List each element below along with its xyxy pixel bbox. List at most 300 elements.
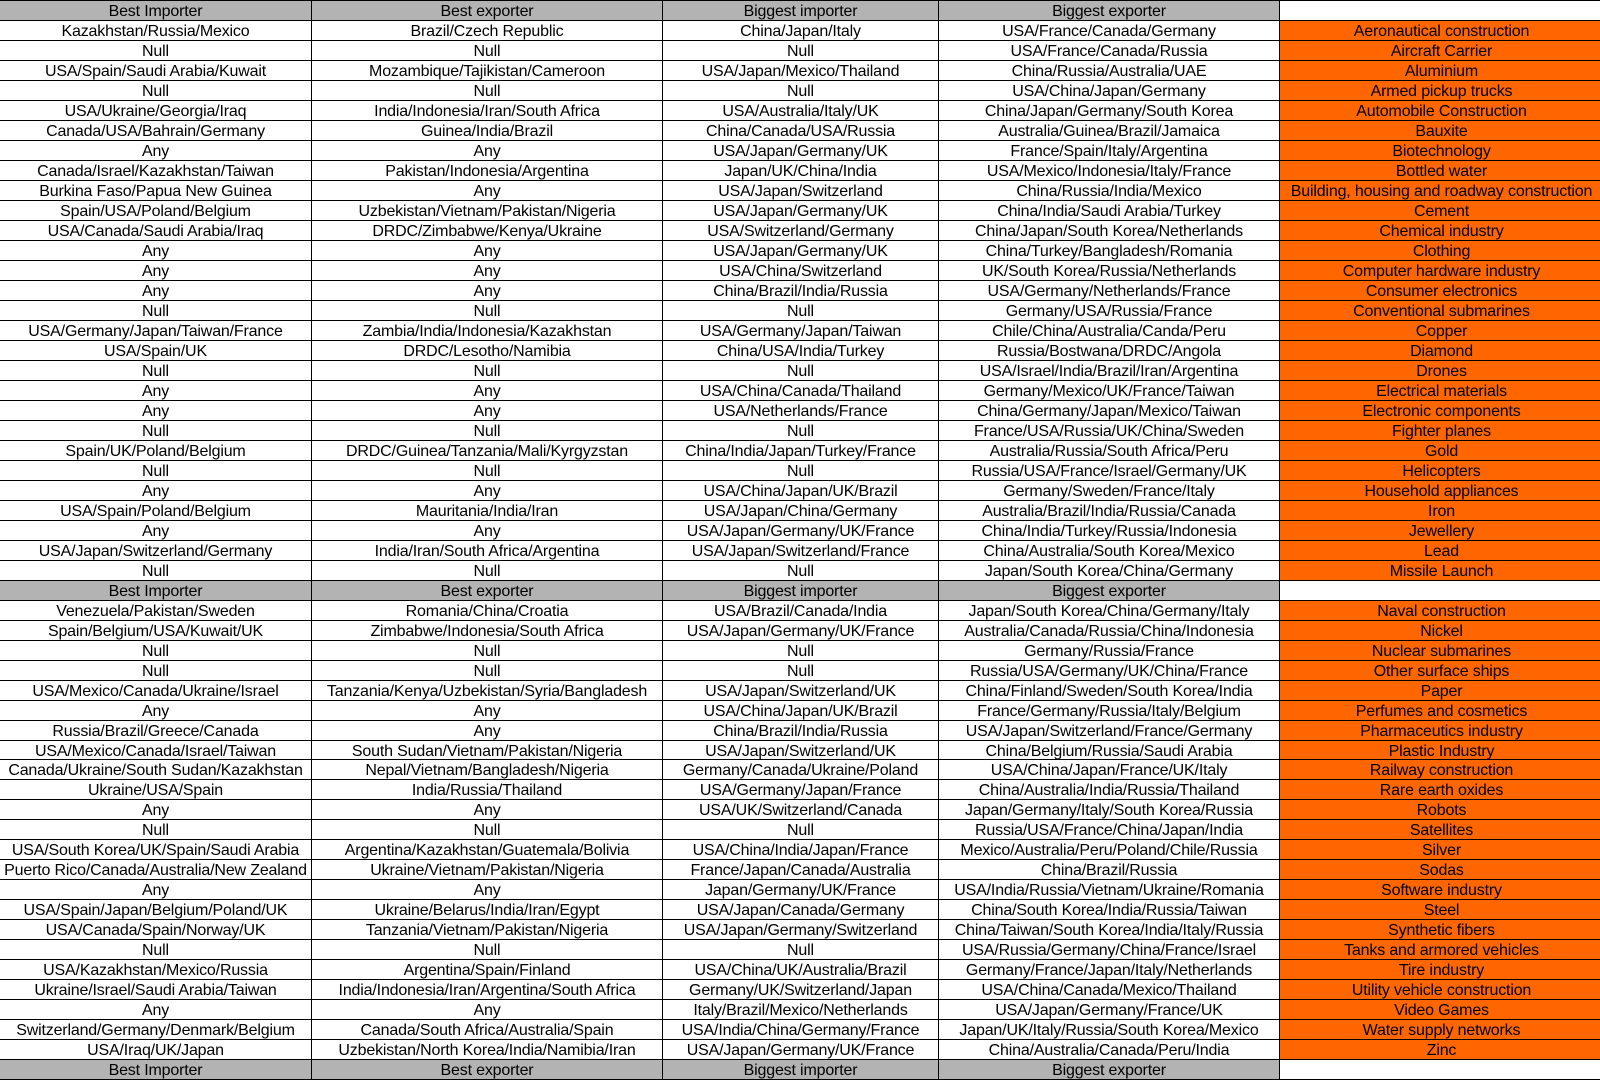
row: Pharmaceutics industry: Russia/Brazil/Greece/Canada [52, 723, 259, 740]
row: Robots: Any [142, 802, 169, 819]
row: Aircraft Carrier: Null [474, 43, 500, 60]
row: Nickel: USA/Japan/Germany/UK/France [687, 623, 914, 640]
row: Chemical industry [0, 220, 1600, 241]
row: Biotechnology: Any [473, 143, 501, 160]
row: Robots: Any [473, 802, 501, 819]
row: Iron: Mauritania/India/Iran [416, 503, 558, 520]
row: Chemical industry: USA/Switzerland/Germany [707, 223, 894, 240]
row: Gold: Gold [1425, 443, 1458, 460]
row: Paper: China/Finland/Sweden/South Korea/India [965, 683, 1253, 700]
row: Bauxite: Bauxite [1415, 123, 1468, 140]
row: Paper: Paper [1421, 683, 1462, 700]
row: Robots [0, 799, 1600, 820]
row: Diamond: Russia/Bostwana/DRDC/Angola [997, 343, 1221, 360]
row: Bauxite: China/Canada/USA/Russia [706, 123, 895, 140]
row: Naval construction: Romania/China/Croatia [406, 603, 568, 620]
row: Bauxite: Australia/Guinea/Brazil/Jamaica [998, 123, 1220, 140]
row: Aluminium: Mozambique/Tajikistan/Cameroon [369, 63, 605, 80]
row: Rare earth oxides: Rare earth oxides [1380, 782, 1503, 799]
row: Perfumes and cosmetics: Any [142, 703, 169, 720]
row: Software industry: USA/India/Russia/Vietnam/Ukraine/Romania [954, 882, 1264, 899]
row: Tire industry: Argentina/Spain/Finland [404, 962, 570, 979]
header row 2: Biggest importer [744, 583, 857, 600]
row: Naval construction: Japan/South Korea/China/Germany/Italy [968, 603, 1249, 620]
row: Zinc [0, 1039, 1600, 1060]
row: Conventional submarines: Conventional submarines [1353, 303, 1530, 320]
row: Aluminium: USA/Japan/Mexico/Thailand [702, 63, 899, 80]
header row 1: Best Importer [109, 3, 202, 20]
row: Missile Launch: Missile Launch [1390, 563, 1493, 580]
row: Bauxite [0, 120, 1600, 141]
row: Electronic components: Any [473, 403, 501, 420]
row: Fighter planes: France/USA/Russia/UK/China/Sweden [974, 423, 1244, 440]
row: Armed pickup trucks: Null [787, 83, 814, 100]
row: Aluminium: China/Russia/Australia/UAE [1012, 63, 1206, 80]
row: Software industry: Any [142, 882, 169, 899]
row: Zinc: China/Australia/Canada/Peru/India [989, 1042, 1229, 1059]
row: Electrical materials: USA/China/Canada/Thailand [700, 383, 901, 400]
row: Drones: Null [142, 363, 169, 380]
row: Railway construction: Canada/Ukraine/South Sudan/Kazakhstan [8, 762, 303, 779]
row: Other surface ships: Null [787, 663, 814, 680]
header row 2 [0, 580, 1600, 601]
row: Gold: DRDC/Guinea/Tanzania/Mali/Kyrgyzstan [346, 443, 628, 460]
row: Video Games: USA/Japan/Germany/France/UK [995, 1002, 1223, 1019]
row: Perfumes and cosmetics [0, 700, 1600, 721]
row: Plastic Industry: Plastic Industry [1389, 743, 1494, 760]
row: Aeronautical construction: USA/France/Canada/Germany [1002, 23, 1216, 40]
row: Bottled water: USA/Mexico/Indonesia/Italy/France [987, 163, 1231, 180]
row: Synthetic fibers [0, 919, 1600, 940]
row: Jewellery: Jewellery [1409, 523, 1474, 540]
row: Perfumes and cosmetics: USA/China/Japan/UK/Brazil [703, 703, 898, 720]
row: Automobile Construction [0, 100, 1600, 121]
row: Zinc: USA/Iraq/UK/Japan [87, 1042, 224, 1059]
row: Water supply networks [0, 1019, 1600, 1040]
row: Video Games: Italy/Brazil/Mexico/Netherlands [693, 1002, 908, 1019]
row: Nuclear submarines [0, 640, 1600, 661]
row: Fighter planes: Null [474, 423, 500, 440]
row: Naval construction: USA/Brazil/Canada/India [714, 603, 887, 620]
row: Sodas: Sodas [1419, 862, 1464, 879]
row: Silver: Argentina/Kazakhstan/Guatemala/Bolivia [345, 842, 629, 859]
row: Synthetic fibers: USA/Canada/Spain/Norway/UK [46, 922, 265, 939]
row: Pharmaceutics industry: Pharmaceutics industry [1360, 723, 1523, 740]
row: Jewellery [0, 520, 1600, 541]
row: Fighter planes: Fighter planes [1392, 423, 1491, 440]
row: Zinc: USA/Japan/Germany/UK/France [687, 1042, 914, 1059]
row: Conventional submarines: Germany/USA/Russia/France [1006, 303, 1212, 320]
header row 3 [0, 1059, 1600, 1080]
header row 3: Biggest importer [744, 1062, 857, 1079]
row: Satellites: Null [142, 822, 169, 839]
row: Silver: USA/China/India/Japan/France [693, 842, 908, 859]
row: Building, housing and roadway construction [0, 180, 1600, 201]
row: Rare earth oxides: China/Australia/India/Russia/Thailand [979, 782, 1239, 799]
row: Silver [0, 839, 1600, 860]
row: Biotechnology [0, 140, 1600, 161]
row: Diamond: China/USA/India/Turkey [717, 343, 884, 360]
row: Armed pickup trucks [0, 80, 1600, 101]
row: Rare earth oxides: Ukraine/USA/Spain [88, 782, 223, 799]
row: Building, housing and roadway construction: USA/Japan/Switzerland [718, 183, 883, 200]
row: Nickel: Zimbabwe/Indonesia/South Africa [370, 623, 604, 640]
row: Computer hardware industry: USA/China/Switzerland [719, 263, 882, 280]
row: Automobile Construction: China/Japan/Germany/South Korea [985, 103, 1233, 120]
row: Fighter planes [0, 420, 1600, 441]
row: Bauxite: Guinea/India/Brazil [421, 123, 553, 140]
row: Missile Launch: Null [142, 563, 169, 580]
row: Aircraft Carrier: USA/France/Canada/Russia [1011, 43, 1207, 60]
row: Robots: Robots [1417, 802, 1466, 819]
row: Drones: Drones [1416, 363, 1467, 380]
row: Software industry: Any [473, 882, 501, 899]
row: Tire industry: USA/China/UK/Australia/Brazil [694, 962, 907, 979]
row: Building, housing and roadway construction: China/Russia/India/Mexico [1016, 183, 1202, 200]
row: Household appliances: Germany/Sweden/France/Italy [1003, 483, 1215, 500]
row: Chemical industry: USA/Canada/Saudi Arabia/Iraq [48, 223, 263, 240]
row: Railway construction: Nepal/Vietnam/Bangladesh/Nigeria [365, 762, 609, 779]
row: Jewellery: Any [142, 523, 169, 540]
row: Household appliances [0, 480, 1600, 501]
row: Nuclear submarines: Germany/Russia/France [1024, 643, 1194, 660]
row: Satellites: Satellites [1410, 822, 1473, 839]
row: Steel: USA/Japan/Canada/Germany [697, 902, 904, 919]
row: Video Games: Any [473, 1002, 501, 1019]
header row 3: Biggest exporter [1052, 1062, 1166, 1079]
row: Copper: USA/Germany/Japan/Taiwan [700, 323, 901, 340]
row: Missile Launch: Japan/South Korea/China/Germany [985, 563, 1233, 580]
row: Consumer electronics [0, 280, 1600, 301]
row: Tanks and armored vehicles: Null [474, 942, 500, 959]
row: Iron [0, 500, 1600, 521]
row: Aircraft Carrier [0, 40, 1600, 61]
row: Software industry [0, 879, 1600, 900]
row: Lead [0, 540, 1600, 561]
row: Utility vehicle construction: Utility vehicle construction [1352, 982, 1531, 999]
row: Aeronautical construction [0, 20, 1600, 41]
row: Electrical materials: Any [142, 383, 169, 400]
row: Silver: Silver [1422, 842, 1461, 859]
row: Electronic components: Any [142, 403, 169, 420]
row: Sodas: France/Japan/Canada/Australia [690, 862, 911, 879]
row: Naval construction: Naval construction [1377, 603, 1506, 620]
row: Aircraft Carrier: Aircraft Carrier [1391, 43, 1492, 60]
row: Diamond: USA/Spain/UK [104, 343, 207, 360]
row: Paper: Tanzania/Kenya/Uzbekistan/Syria/Bangladesh [327, 683, 647, 700]
row: Biotechnology: Biotechnology [1392, 143, 1491, 160]
row: Bottled water: Canada/Israel/Kazakhstan/Taiwan [37, 163, 274, 180]
row: Chemical industry: DRDC/Zimbabwe/Kenya/Ukraine [372, 223, 602, 240]
row: Conventional submarines [0, 300, 1600, 321]
row: Automobile Construction: Automobile Construction [1356, 103, 1527, 120]
row: Other surface ships: Null [142, 663, 169, 680]
row: Naval construction: Venezuela/Pakistan/Sweden [56, 603, 255, 620]
row: Tanks and armored vehicles: USA/Russia/Germany/China/France/Israel [962, 942, 1256, 959]
header row 2: Biggest exporter [1052, 583, 1166, 600]
row: Synthetic fibers: Tanzania/Vietnam/Pakistan/Nigeria [366, 922, 608, 939]
row: Conventional submarines: Null [142, 303, 169, 320]
row: Bottled water: Pakistan/Indonesia/Argentina [385, 163, 589, 180]
row: Clothing: Any [473, 243, 501, 260]
row: Automobile Construction: USA/Australia/Italy/UK [722, 103, 879, 120]
row: Nickel: Australia/Canada/Russia/China/Indonesia [964, 623, 1254, 640]
row: Bottled water [0, 160, 1600, 181]
header row 2: Best Importer [109, 583, 202, 600]
row: Tire industry: USA/Kazakhstan/Mexico/Russia [43, 962, 268, 979]
row: Lead: Lead [1424, 543, 1459, 560]
row: Plastic Industry: South Sudan/Vietnam/Pakistan/Nigeria [352, 743, 622, 760]
row: Household appliances: Any [473, 483, 501, 500]
row: Nuclear submarines: Null [142, 643, 169, 660]
row: Nickel: Nickel [1420, 623, 1463, 640]
row: Electrical materials: Any [473, 383, 501, 400]
row: Cement: USA/Japan/Germany/UK [713, 203, 888, 220]
row: Copper: USA/Germany/Japan/Taiwan/France [28, 323, 283, 340]
row: Pharmaceutics industry [0, 720, 1600, 741]
row: Cement: Uzbekistan/Vietnam/Pakistan/Nigeria [358, 203, 616, 220]
row: Robots: Japan/Germany/Italy/South Korea/Russia [965, 802, 1253, 819]
row: Copper: Zambia/India/Indonesia/Kazakhstan [363, 323, 611, 340]
row: Fighter planes: Null [142, 423, 169, 440]
row: Nickel [0, 620, 1600, 641]
row: Missile Launch: Null [474, 563, 500, 580]
row: Nuclear submarines: Null [474, 643, 500, 660]
row: Steel: Steel [1424, 902, 1459, 919]
row: Biotechnology: USA/Japan/Germany/UK [713, 143, 888, 160]
row: Aircraft Carrier: Null [787, 43, 814, 60]
row: Consumer electronics: Consumer electronics [1366, 283, 1517, 300]
row: Computer hardware industry: Any [142, 263, 169, 280]
row: Other surface ships: Other surface ships [1374, 663, 1509, 680]
row: Drones [0, 360, 1600, 381]
header row 1: Biggest importer [744, 3, 857, 20]
row: Zinc: Uzbekistan/North Korea/India/Namibia/Iran [338, 1042, 636, 1059]
row: Aluminium [0, 60, 1600, 81]
row: Armed pickup trucks: USA/China/Japan/Germany [1012, 83, 1206, 100]
row: Other surface ships: Russia/USA/Germany/UK/China/France [970, 663, 1248, 680]
row: Video Games: Video Games [1394, 1002, 1489, 1019]
row: Water supply networks: Canada/South Africa/Australia/Spain [361, 1022, 613, 1039]
row: Armed pickup trucks: Null [142, 83, 169, 100]
row: Aluminium: USA/Spain/Saudi Arabia/Kuwait [45, 63, 266, 80]
row: Tanks and armored vehicles: Null [142, 942, 169, 959]
row: Missile Launch: Null [787, 563, 814, 580]
row: Cement [0, 200, 1600, 221]
row: Tire industry: Tire industry [1399, 962, 1484, 979]
row: Gold: Australia/Russia/South Africa/Peru [990, 443, 1228, 460]
row: Other surface ships [0, 660, 1600, 681]
row: Electrical materials: Germany/Mexico/UK/France/Taiwan [984, 383, 1234, 400]
row: Lead: USA/Japan/Switzerland/Germany [39, 543, 272, 560]
row: Computer hardware industry [0, 260, 1600, 281]
row: Other surface ships: Null [474, 663, 500, 680]
row: Building, housing and roadway construction: Building, housing and roadway construction [1291, 183, 1592, 200]
row: Biotechnology: Any [142, 143, 169, 160]
row: Paper: USA/Japan/Switzerland/UK [705, 683, 896, 700]
row: Sodas: Ukraine/Vietnam/Pakistan/Nigeria [370, 862, 604, 879]
row: Lead: India/Iran/South Africa/Argentina [375, 543, 599, 560]
row: Video Games: Any [142, 1002, 169, 1019]
row: Copper [0, 320, 1600, 341]
row: Household appliances: Household appliances [1364, 483, 1519, 500]
row: Clothing: USA/Japan/Germany/UK [713, 243, 888, 260]
row: Steel [0, 899, 1600, 920]
row: Perfumes and cosmetics: Perfumes and cosmetics [1356, 703, 1527, 720]
row: Armed pickup trucks: Armed pickup trucks [1371, 83, 1512, 100]
row: Bauxite: Canada/USA/Bahrain/Germany [46, 123, 265, 140]
row: Missile Launch [0, 560, 1600, 581]
row: Plastic Industry: USA/Mexico/Canada/Israel/Taiwan [35, 743, 276, 760]
row: Nickel: Spain/Belgium/USA/Kuwait/UK [48, 623, 263, 640]
row: Paper: USA/Mexico/Canada/Ukraine/Israel [32, 683, 279, 700]
row: Electronic components: Electronic components [1362, 403, 1521, 420]
row: Electronic components: USA/Netherlands/France [713, 403, 888, 420]
row: Consumer electronics: Any [142, 283, 169, 300]
row: Diamond: DRDC/Lesotho/Namibia [403, 343, 571, 360]
row: Electronic components: China/Germany/Japan/Mexico/Taiwan [977, 403, 1241, 420]
row: Jewellery: USA/Japan/Germany/UK/France [687, 523, 914, 540]
row: Aeronautical construction: Brazil/Czech Republic [411, 23, 563, 40]
row: Chemical industry: China/Japan/South Korea/Netherlands [975, 223, 1243, 240]
row: Rare earth oxides [0, 779, 1600, 800]
header row 2: Best exporter [441, 583, 533, 600]
row: Helicopters: Null [142, 463, 169, 480]
row: Satellites: Null [787, 822, 814, 839]
row: Chemical industry: Chemical industry [1379, 223, 1504, 240]
row: Silver: USA/South Korea/UK/Spain/Saudi Arabia [12, 842, 299, 859]
row: Copper: Copper [1416, 323, 1467, 340]
row: Gold: Spain/UK/Poland/Belgium [65, 443, 246, 460]
row: Utility vehicle construction: India/Indonesia/Iran/Argentina/South Africa [339, 982, 635, 999]
row: Steel: Ukraine/Belarus/India/Iran/Egypt [375, 902, 599, 919]
row: Perfumes and cosmetics: France/Germany/Russia/Italy/Belgium [977, 703, 1241, 720]
row: Zinc: Zinc [1427, 1042, 1456, 1059]
row: Building, housing and roadway construction: Burkina Faso/Papua New Guinea [39, 183, 272, 200]
row: Sodas [0, 859, 1600, 880]
row: Jewellery: China/India/Turkey/Russia/Indonesia [982, 523, 1236, 540]
row: Iron: Australia/Brazil/India/Russia/Canada [982, 503, 1236, 520]
row: Electrical materials [0, 380, 1600, 401]
header row 3: Best exporter [441, 1062, 533, 1079]
row: Aluminium: Aluminium [1405, 63, 1478, 80]
row: Copper: Chile/China/Australia/Canda/Peru [992, 323, 1226, 340]
header row 1: Biggest exporter [1052, 3, 1166, 20]
row: Plastic Industry [0, 740, 1600, 761]
row: Railway construction: Railway construction [1370, 762, 1513, 779]
row: Rare earth oxides: USA/Germany/Japan/France [700, 782, 901, 799]
row: Clothing [0, 240, 1600, 261]
row: Railway construction: USA/China/Japan/France/UK/Italy [991, 762, 1227, 779]
header row 1: Best exporter [441, 3, 533, 20]
row: Utility vehicle construction: Germany/UK/Switzerland/Japan [689, 982, 912, 999]
row: Gold [0, 440, 1600, 461]
row: Helicopters [0, 460, 1600, 481]
row: Clothing: China/Turkey/Bangladesh/Romania [986, 243, 1232, 260]
row: Video Games [0, 999, 1600, 1020]
row: Building, housing and roadway construction: Any [473, 183, 501, 200]
row: Computer hardware industry: Computer hardware industry [1343, 263, 1540, 280]
row: Iron: USA/Spain/Poland/Belgium [60, 503, 251, 520]
row: Helicopters: Null [787, 463, 814, 480]
row: Electrical materials: Electrical materials [1376, 383, 1507, 400]
row: Cement: China/India/Saudi Arabia/Turkey [997, 203, 1221, 220]
row: Satellites: Russia/USA/France/China/Japan/India [975, 822, 1243, 839]
row: Satellites: Null [474, 822, 500, 839]
row: Satellites [0, 819, 1600, 840]
row: Consumer electronics: Any [473, 283, 501, 300]
row: Diamond [0, 340, 1600, 361]
row: Helicopters: Helicopters [1402, 463, 1481, 480]
row: Water supply networks: USA/India/China/Germany/France [682, 1022, 919, 1039]
row: Synthetic fibers: USA/Japan/Germany/Switzerland [684, 922, 917, 939]
row: Naval construction [0, 600, 1600, 621]
row: Household appliances: Any [142, 483, 169, 500]
row: Silver: Mexico/Australia/Peru/Poland/Chile/Russia [960, 842, 1258, 859]
row: Pharmaceutics industry: Any [473, 723, 501, 740]
row: Lead: USA/Japan/Switzerland/France [692, 543, 909, 560]
header row 1 [0, 0, 1600, 21]
row: Iron: Iron [1428, 503, 1455, 520]
row: Jewellery: Any [473, 523, 501, 540]
row: Drones: USA/Israel/India/Brazil/Iran/Argentina [980, 363, 1238, 380]
row: Tanks and armored vehicles: Null [787, 942, 814, 959]
row: Sodas: Puerto Rico/Canada/Australia/New Zealand [4, 862, 307, 879]
row: Computer hardware industry: UK/South Korea/Russia/Netherlands [982, 263, 1236, 280]
row: Bottled water: Bottled water [1396, 163, 1487, 180]
row: Software industry: Software industry [1381, 882, 1502, 899]
row: Household appliances: USA/China/Japan/UK/Brazil [703, 483, 898, 500]
row: Aircraft Carrier: Null [142, 43, 169, 60]
row: Aeronautical construction: China/Japan/Italy [740, 23, 861, 40]
row: Steel: China/South Korea/India/Russia/Taiwan [971, 902, 1247, 919]
row: Utility vehicle construction: USA/China/Canada/Mexico/Thailand [981, 982, 1237, 999]
row: Steel: USA/Spain/Japan/Belgium/Poland/UK [24, 902, 287, 919]
row: Aeronautical construction: Aeronautical construction [1354, 23, 1529, 40]
row: Utility vehicle construction [0, 979, 1600, 1000]
row: Lead: China/Australia/South Korea/Mexico [983, 543, 1235, 560]
row: Robots: USA/UK/Switzerland/Canada [699, 802, 902, 819]
row: Consumer electronics: USA/Germany/Netherlands/France [987, 283, 1230, 300]
row: Water supply networks: Water supply networks [1363, 1022, 1520, 1039]
row: Perfumes and cosmetics: Any [473, 703, 501, 720]
row: Automobile Construction: USA/Ukraine/Georgia/Iraq [65, 103, 246, 120]
row: Biotechnology: France/Spain/Italy/Argentina [1010, 143, 1208, 160]
row: Synthetic fibers: China/Taiwan/South Korea/India/Italy/Russia [955, 922, 1263, 939]
row: Electronic components [0, 400, 1600, 421]
row: Utility vehicle construction: Ukraine/Israel/Saudi Arabia/Taiwan [34, 982, 277, 999]
row: Tanks and armored vehicles [0, 939, 1600, 960]
row: Conventional submarines: Null [474, 303, 500, 320]
row: Drones: Null [787, 363, 814, 380]
row: Cement: Cement [1414, 203, 1469, 220]
row: Drones: Null [474, 363, 500, 380]
row: Water supply networks: Japan/UK/Italy/Russia/South Korea/Mexico [959, 1022, 1259, 1039]
row: Paper [0, 680, 1600, 701]
row: Automobile Construction: India/Indonesia/Iran/South Africa [374, 103, 600, 120]
row: Aeronautical construction: Kazakhstan/Russia/Mexico [61, 23, 250, 40]
row: Gold: China/India/Japan/Turkey/France [685, 443, 916, 460]
row: Clothing: Any [142, 243, 169, 260]
row: Pharmaceutics industry: USA/Japan/Switzerland/France/Germany [966, 723, 1252, 740]
row: Consumer electronics: China/Brazil/India/Russia [713, 283, 888, 300]
row: Nuclear submarines: Null [787, 643, 814, 660]
row: Railway construction: Germany/Canada/Ukraine/Poland [683, 762, 918, 779]
row: Diamond: Diamond [1410, 343, 1473, 360]
row: Computer hardware industry: Any [473, 263, 501, 280]
row: Conventional submarines: Null [787, 303, 814, 320]
row: Armed pickup trucks: Null [474, 83, 500, 100]
